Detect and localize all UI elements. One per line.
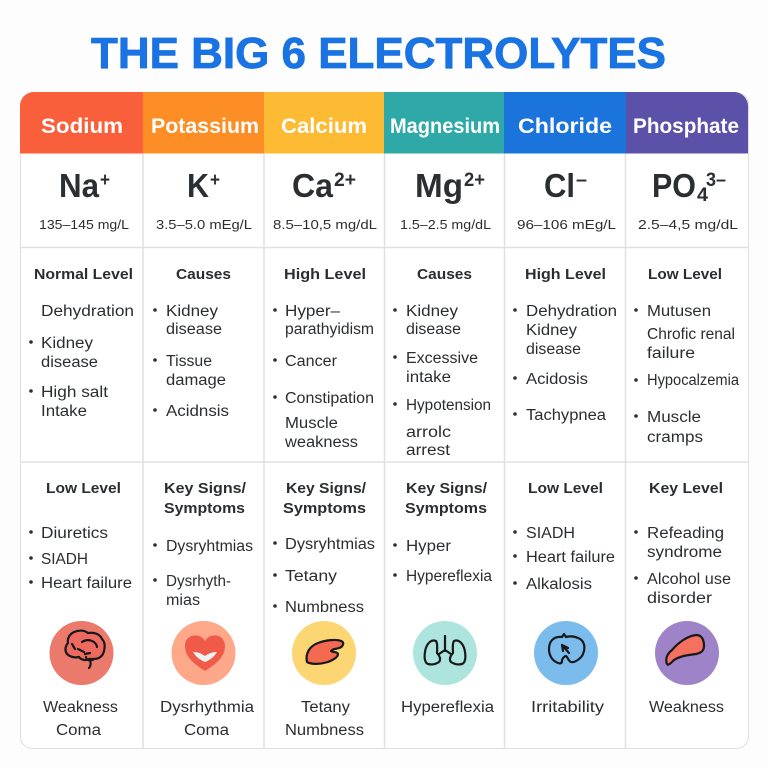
symbol: K+: + <box>210 170 220 191</box>
section: Causes: Kidney <box>406 303 458 320</box>
section: High Level: Hyper– <box>285 303 340 320</box>
symbol: PO4 3-: PO <box>652 167 696 204</box>
section: Low Level: Heart failure <box>41 575 132 592</box>
section: Low Level: Low Level <box>528 481 603 497</box>
section: Key Signs / Symptoms: Dysryhtmias <box>166 538 253 555</box>
section: Normal Level: High salt <box>41 384 109 401</box>
section: High Level: disease <box>526 341 581 358</box>
section: Low Level: cramps <box>647 429 703 446</box>
section: Causes: arrolc <box>406 424 451 441</box>
symbol: Cl-: Cl <box>544 167 575 204</box>
icon: heart <box>172 621 236 685</box>
section: Key Signs / Symptoms: Dysrhyth- <box>166 573 231 590</box>
header band <box>20 92 748 154</box>
column: Calcium <box>273 167 377 739</box>
symbol: Ca2+: 2+ <box>334 170 356 191</box>
section: High Level: Tachypnea <box>526 407 606 424</box>
symptoms: Dysrhythmia, Coma: Dysrhythmia <box>160 699 254 716</box>
normal range: 8.5–10,5 mg/dL <box>273 217 377 232</box>
section: Key Signs / Symptoms: Key Signs/ <box>286 481 366 497</box>
section: High Level: Acidosis <box>526 371 588 388</box>
column: Chloride <box>513 167 617 716</box>
normal range: 1.5–2.5 mg/dL <box>400 217 491 232</box>
section: Key Signs / Symptoms: Symptoms <box>283 501 366 517</box>
icon: irritability organ <box>534 621 598 685</box>
symptoms: Weakness, Coma: Weakness <box>43 699 118 716</box>
symptoms: Weakness, Coma: Coma <box>56 722 101 739</box>
section: Key Signs / Symptoms: mias <box>166 592 200 609</box>
symbol: Cl-: – <box>576 170 587 191</box>
symbol: Na+: Na <box>59 167 100 204</box>
section: Causes: intake <box>406 369 451 386</box>
section: Causes: damage <box>166 372 226 389</box>
icon: brain <box>50 621 114 685</box>
header: Phosphate: Phosphate <box>633 115 739 138</box>
section: Key Signs / Symptoms: Tetany <box>285 568 337 585</box>
section: Key Level: syndrome <box>647 544 722 561</box>
symptom: Irritability: Irritability <box>531 699 604 716</box>
section: Causes: Tissue <box>166 353 212 370</box>
column: Potassium <box>153 167 254 739</box>
normal range: 135–145 mg/L <box>39 217 129 232</box>
section: High Level: High Level <box>284 267 366 283</box>
section: Normal Level: Kidney <box>41 335 93 352</box>
section: Low Level: Hypocalzemia <box>647 372 739 389</box>
section: Causes: Kidney <box>166 303 218 320</box>
section: Causes: disease <box>166 321 222 338</box>
normal range: 96–106 mEg/L <box>517 217 616 232</box>
section: Low Level: Chrofic renal <box>647 326 735 343</box>
header: Phosphate <box>626 92 748 154</box>
section: Normal Level: disease <box>41 354 98 371</box>
section: Causes <box>393 267 491 459</box>
symptoms: Dysrhythmia, Coma <box>160 699 254 739</box>
header: Calcium <box>264 92 384 154</box>
section: High Level: weakness <box>284 434 358 451</box>
section: High Level: Constipation <box>285 390 374 407</box>
symbol: Mg2+: Mg <box>415 167 463 204</box>
header: Magnesium: Magnesium <box>390 115 500 138</box>
section: Causes: Causes <box>417 267 472 283</box>
section: Key Level <box>634 481 731 607</box>
symptom: Hypereflexia: Hypereflexia <box>401 699 494 716</box>
section: Key Signs / Symptoms <box>273 481 375 616</box>
column: Sodium <box>29 167 134 739</box>
header: Chloride <box>504 92 626 154</box>
section: Key Signs / Symptoms: Key Signs/ <box>164 481 246 497</box>
header: Potassium: Potassium <box>151 115 259 138</box>
symptoms: Tetany, Numbness <box>285 699 364 739</box>
section: Low Level <box>634 267 739 446</box>
section: High Level: Dehydration <box>526 303 617 320</box>
symptoms: Dysrhythmia, Coma: Coma <box>184 722 229 739</box>
symbol: PO4 3-: 3– <box>706 170 726 191</box>
section: Causes: Causes <box>176 267 231 283</box>
section: Key Signs / Symptoms: Hypereflexia <box>406 568 492 585</box>
section: Causes: arrest <box>406 442 451 459</box>
header: Sodium <box>20 92 143 154</box>
section: Low Level: Muscle <box>647 409 701 426</box>
section: Low Level: SIADH <box>526 525 575 542</box>
normal range: 2.5–4,5 mg/dL <box>638 217 738 232</box>
symbol: PO4 3-: 4 <box>697 185 708 206</box>
header: Sodium: Sodium <box>41 115 123 138</box>
section: Low Level: Mutusen <box>647 303 711 320</box>
header: Calcium: Calcium <box>281 115 367 138</box>
section: Normal Level: Intake <box>41 403 87 420</box>
section: Key Level: Key Level <box>649 481 723 497</box>
symptoms: Tetany, Numbness: Tetany <box>301 699 350 716</box>
section: Key Signs / Symptoms: Dysryhtmias <box>285 536 375 553</box>
header: Potassium <box>143 92 264 154</box>
section: Low Level: Low Level <box>648 267 722 283</box>
section: Key Signs / Symptoms: Symptoms <box>164 501 245 517</box>
section: Normal Level: Normal Level <box>34 267 133 283</box>
symptom: Weakness: Weakness <box>649 699 724 716</box>
section: Key Signs / Symptoms: Hyper <box>406 538 451 555</box>
symbol: PO4 3- <box>652 167 726 206</box>
section: Low Level: Diuretics <box>41 525 108 542</box>
section: Causes <box>153 267 231 420</box>
section: Key Level: Refeading <box>647 525 724 542</box>
section: Normal Level <box>29 267 134 420</box>
section: Key Signs / Symptoms <box>153 481 253 609</box>
header: Magnesium <box>384 92 504 154</box>
normal range: 3.5–5.0 mEg/L <box>156 217 252 232</box>
section: Low Level <box>29 481 132 592</box>
icon: muscle <box>292 621 356 685</box>
section: Normal Level: Dehydration <box>41 303 134 320</box>
symbol: Mg2+: 2+ <box>464 170 485 191</box>
section: Low Level <box>513 481 615 593</box>
section: Key Signs / Symptoms: Key Signs/ <box>406 481 487 497</box>
symbol: Ca2+: Ca <box>292 167 334 204</box>
section: High Level <box>273 267 374 451</box>
section: Causes: Hypotension <box>406 397 491 414</box>
section: High Level <box>513 267 617 424</box>
section: Key Level: disorder <box>647 590 712 607</box>
section: High Level: Muscle <box>285 415 338 432</box>
section: Low Level: failure <box>647 345 695 362</box>
header: Chloride: Chloride <box>518 115 612 138</box>
symptoms: Tetany, Numbness: Numbness <box>285 722 364 739</box>
section: High Level: High Level <box>525 267 606 283</box>
section: Key Signs / Symptoms: Numbness <box>285 599 364 616</box>
section: Causes: disease <box>406 321 461 338</box>
section: High Level: Cancer <box>285 353 337 370</box>
section: Causes: Acidnsis <box>166 403 229 420</box>
section: High Level: parathyidism <box>285 321 374 338</box>
section: Causes: Excessive <box>406 350 478 367</box>
section: Key Signs / Symptoms <box>393 481 492 585</box>
symbol: K+: K <box>187 167 209 204</box>
icon: kidney-shaped organ <box>655 621 719 685</box>
section: Low Level: Alkalosis <box>526 576 592 593</box>
section: Key Signs / Symptoms: Symptoms <box>405 501 487 517</box>
icon: lungs <box>413 621 477 685</box>
section: Low Level: SIADH <box>41 551 88 568</box>
section: Low Level: Heart failure <box>526 549 615 566</box>
section: High Level: Kidney <box>526 322 577 339</box>
symbol: Mg2+ <box>415 167 485 204</box>
symbol: Na+: + <box>100 170 110 191</box>
title: THE BIG 6 ELECTROLYTES <box>91 29 666 78</box>
section: Low Level: Low Level <box>46 481 121 497</box>
symbol: Ca2+ <box>292 167 356 204</box>
symptoms: Weakness, Coma <box>43 699 118 739</box>
column: Phosphate <box>634 167 739 716</box>
column: Magnesium <box>393 167 494 716</box>
section: Key Level: Alcohol use <box>647 571 731 588</box>
